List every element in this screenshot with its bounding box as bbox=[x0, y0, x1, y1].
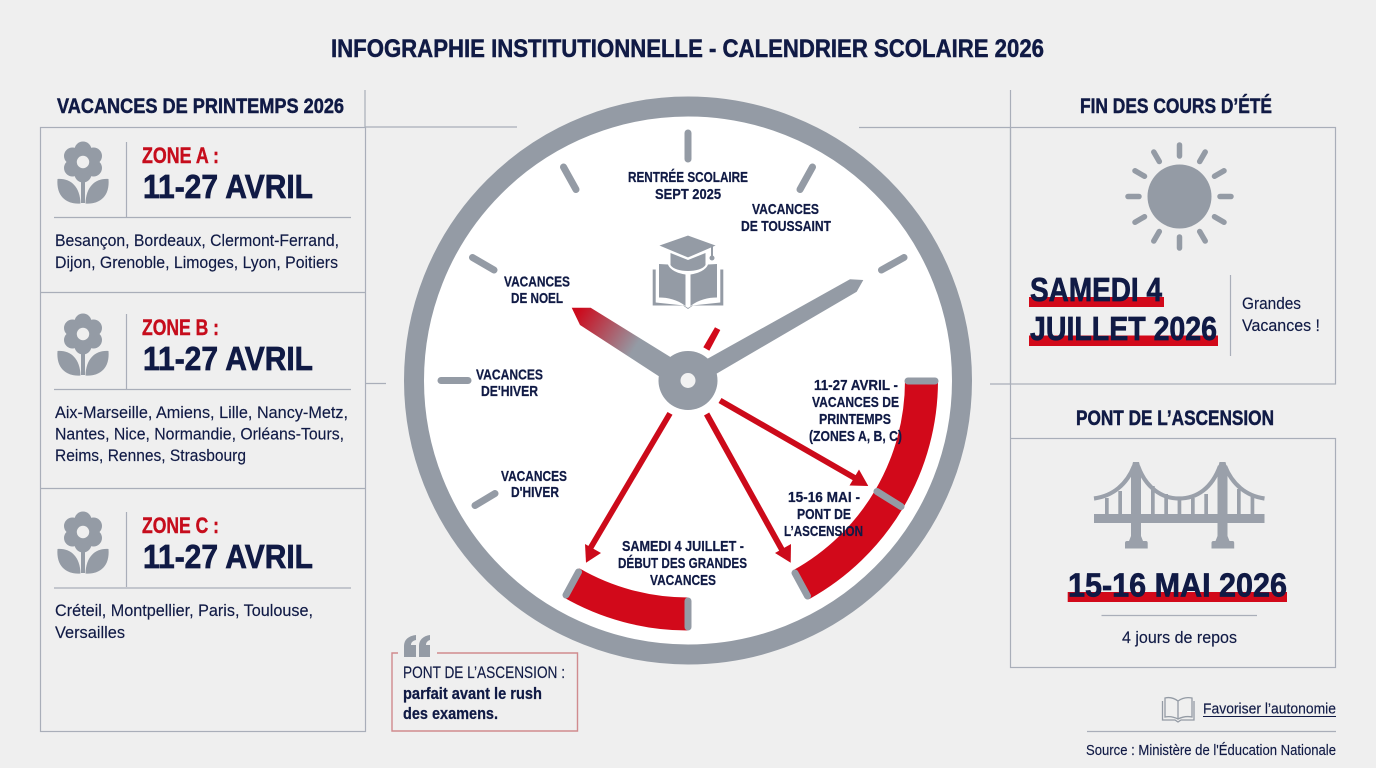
label: hiver 2: VACANCES bbox=[501, 468, 567, 485]
red arc: grandes vacances bbox=[566, 572, 688, 627]
zone C label: ZONE C : bbox=[142, 513, 219, 538]
zone A dates: 11-27 AVRIL bbox=[143, 168, 313, 205]
clock labels bbox=[476, 169, 902, 589]
red arc: printemps and ascension bbox=[795, 380, 935, 596]
zone B label: ZONE B : bbox=[142, 315, 219, 340]
zone B cities bbox=[55, 403, 348, 465]
date: 15-16 mai 2026: 15-16 MAI 2026 bbox=[1068, 566, 1287, 604]
icon: graduation cap and book bbox=[653, 235, 723, 309]
label: noel: VACANCES bbox=[504, 274, 570, 290]
icon: sun bbox=[1128, 145, 1231, 248]
label: hiver 1: VACANCES bbox=[476, 366, 543, 384]
zone A cities: Besançon, Bordeaux, Clermont-Ferrand, bbox=[55, 231, 339, 250]
label: ascension: L’ASCENSION bbox=[784, 523, 863, 540]
label: printemps: (ZONES A, B, C) bbox=[809, 428, 902, 445]
zone B dates: 11-27 AVRIL bbox=[143, 340, 313, 377]
source: Source : Ministère de l'Éducation Nationale bbox=[1086, 742, 1336, 759]
zone A label: ZONE A : bbox=[142, 143, 219, 168]
label: juillet bbox=[618, 538, 747, 589]
label: printemps: VACANCES DE bbox=[812, 394, 899, 411]
zone B bbox=[54, 314, 351, 465]
callout text bbox=[403, 663, 565, 723]
icon: flower C bbox=[57, 512, 109, 574]
label: noel: DE NOEL bbox=[511, 290, 563, 307]
icon: bridge bbox=[1094, 462, 1264, 548]
heading: fin des cours: FIN DES COURS D’ÉTÉ bbox=[1080, 95, 1272, 118]
label: rentree bbox=[628, 169, 748, 203]
link: favoriser l'autonomie: Favoriser l’autonomie bbox=[1203, 700, 1336, 718]
clock hands bbox=[572, 279, 863, 410]
label: rentree: RENTRÉE SCOLAIRE bbox=[628, 169, 748, 186]
arrow: vers pont de l'ascension bbox=[704, 412, 791, 563]
label: printemps: 11-27 AVRIL - bbox=[814, 377, 898, 394]
zone C cities: Créteil, Montpellier, Paris, Toulouse, bbox=[55, 601, 313, 620]
label: juillet: DÉBUT DES GRANDES bbox=[618, 555, 747, 572]
clock face bbox=[414, 106, 962, 654]
note: grandes vacances bbox=[1242, 294, 1320, 335]
icon: flower B bbox=[57, 314, 109, 376]
panel: fin des cours bbox=[1010, 95, 1336, 384]
label: juillet: VACANCES bbox=[650, 572, 716, 589]
zone A cities: Dijon, Grenoble, Limoges, Lyon, Poitiers bbox=[55, 253, 338, 272]
callout text: des examens. bbox=[403, 704, 498, 723]
label: hiver 1: DE'HIVER bbox=[481, 383, 538, 400]
label: toussaint bbox=[741, 201, 831, 235]
arrow: vers vacances de printemps bbox=[718, 398, 868, 486]
title: INFOGRAPHIE INSTITUTIONNELLE - CALENDRIER SCOLAIRE 2026 bbox=[331, 35, 1044, 63]
highlight bars bbox=[1029, 297, 1218, 346]
zone C cities bbox=[55, 601, 313, 642]
note: grandes vacances: Grandes bbox=[1242, 294, 1301, 313]
label: printemps: PRINTEMPS bbox=[819, 411, 891, 428]
callout text: PONT DE L’ASCENSION : bbox=[403, 663, 565, 682]
zone B cities: Nantes, Nice, Normandie, Orléans-Tours, bbox=[55, 424, 344, 444]
panel: vacances de printemps bbox=[40, 95, 366, 732]
callout: pont de l'ascension bbox=[392, 635, 578, 731]
date: samedi 4 juillet 2026 bbox=[1030, 271, 1217, 347]
zone C bbox=[54, 512, 351, 642]
label: toussaint: DE TOUSSAINT bbox=[741, 218, 831, 235]
panel: pont de l'ascension bbox=[1010, 407, 1336, 668]
arrow: vers grandes vacances bbox=[585, 412, 672, 563]
icon: open book bbox=[1162, 698, 1194, 722]
zone C cities: Versailles bbox=[55, 623, 125, 642]
label: ascension: PONT DE bbox=[797, 506, 851, 523]
label: ascension bbox=[784, 489, 863, 540]
clock ticks bbox=[441, 133, 904, 506]
clock bbox=[414, 106, 962, 654]
label: hiver 1 bbox=[476, 366, 543, 400]
label: ascension: 15-16 MAI - bbox=[788, 489, 860, 506]
label: rentree: SEPT 2025 bbox=[655, 186, 721, 203]
label: noel bbox=[504, 274, 570, 307]
label: printemps bbox=[809, 377, 902, 445]
footer bbox=[1086, 698, 1336, 759]
label: hiver 2: D'HIVER bbox=[511, 484, 559, 501]
note: grandes vacances: Vacances ! bbox=[1242, 316, 1320, 335]
zone A bbox=[54, 142, 351, 272]
zone B cities: Reims, Rennes, Strasbourg bbox=[55, 446, 246, 465]
zone C dates: 11-27 AVRIL bbox=[143, 538, 313, 575]
heading: pont de l'ascension: PONT DE L’ASCENSION bbox=[1076, 407, 1274, 430]
heading: vacances de printemps: VACANCES DE PRINTEMPS 2026 bbox=[57, 95, 344, 118]
zone A cities bbox=[55, 231, 339, 272]
icon: flower A bbox=[57, 142, 109, 204]
label: toussaint: VACANCES bbox=[752, 201, 819, 218]
zone B cities: Aix-Marseille, Amiens, Lille, Nancy-Metz, bbox=[55, 403, 348, 422]
note: 4 jours de repos: 4 jours de repos bbox=[1122, 628, 1237, 647]
label: hiver 2 bbox=[501, 468, 567, 501]
date: samedi 4 juillet 2026: JUILLET 2026 bbox=[1030, 310, 1217, 347]
highlight bar bbox=[1068, 592, 1287, 602]
icon: quotation mark bbox=[404, 635, 430, 657]
date: samedi 4 juillet 2026: SAMEDI 4 bbox=[1030, 271, 1163, 308]
label: juillet: SAMEDI 4 JUILLET - bbox=[622, 538, 744, 555]
callout text: parfait avant le rush bbox=[403, 684, 542, 703]
